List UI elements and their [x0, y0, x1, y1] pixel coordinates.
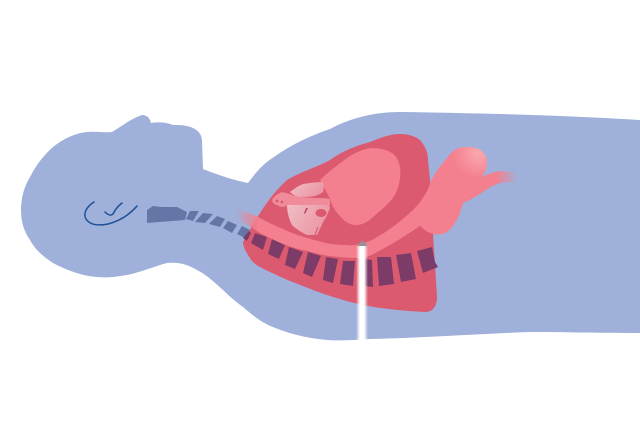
scope tip	[358, 241, 367, 248]
airway band	[235, 185, 438, 258]
scope beam	[356, 246, 368, 340]
upper airway vertebrae	[147, 206, 250, 238]
strap holes	[276, 200, 278, 202]
mask details	[316, 209, 326, 217]
throat mask, strap	[272, 192, 330, 207]
throat mask, upper piece	[290, 182, 324, 197]
stomach	[417, 147, 487, 234]
lung cavity	[243, 134, 437, 312]
throat mask, lower piece	[287, 199, 330, 235]
mouth and jaw line	[85, 202, 137, 225]
duodenum fading right	[463, 171, 518, 203]
spine segments in chest	[243, 231, 438, 287]
body silhouette	[21, 112, 640, 340]
heart	[320, 148, 400, 225]
